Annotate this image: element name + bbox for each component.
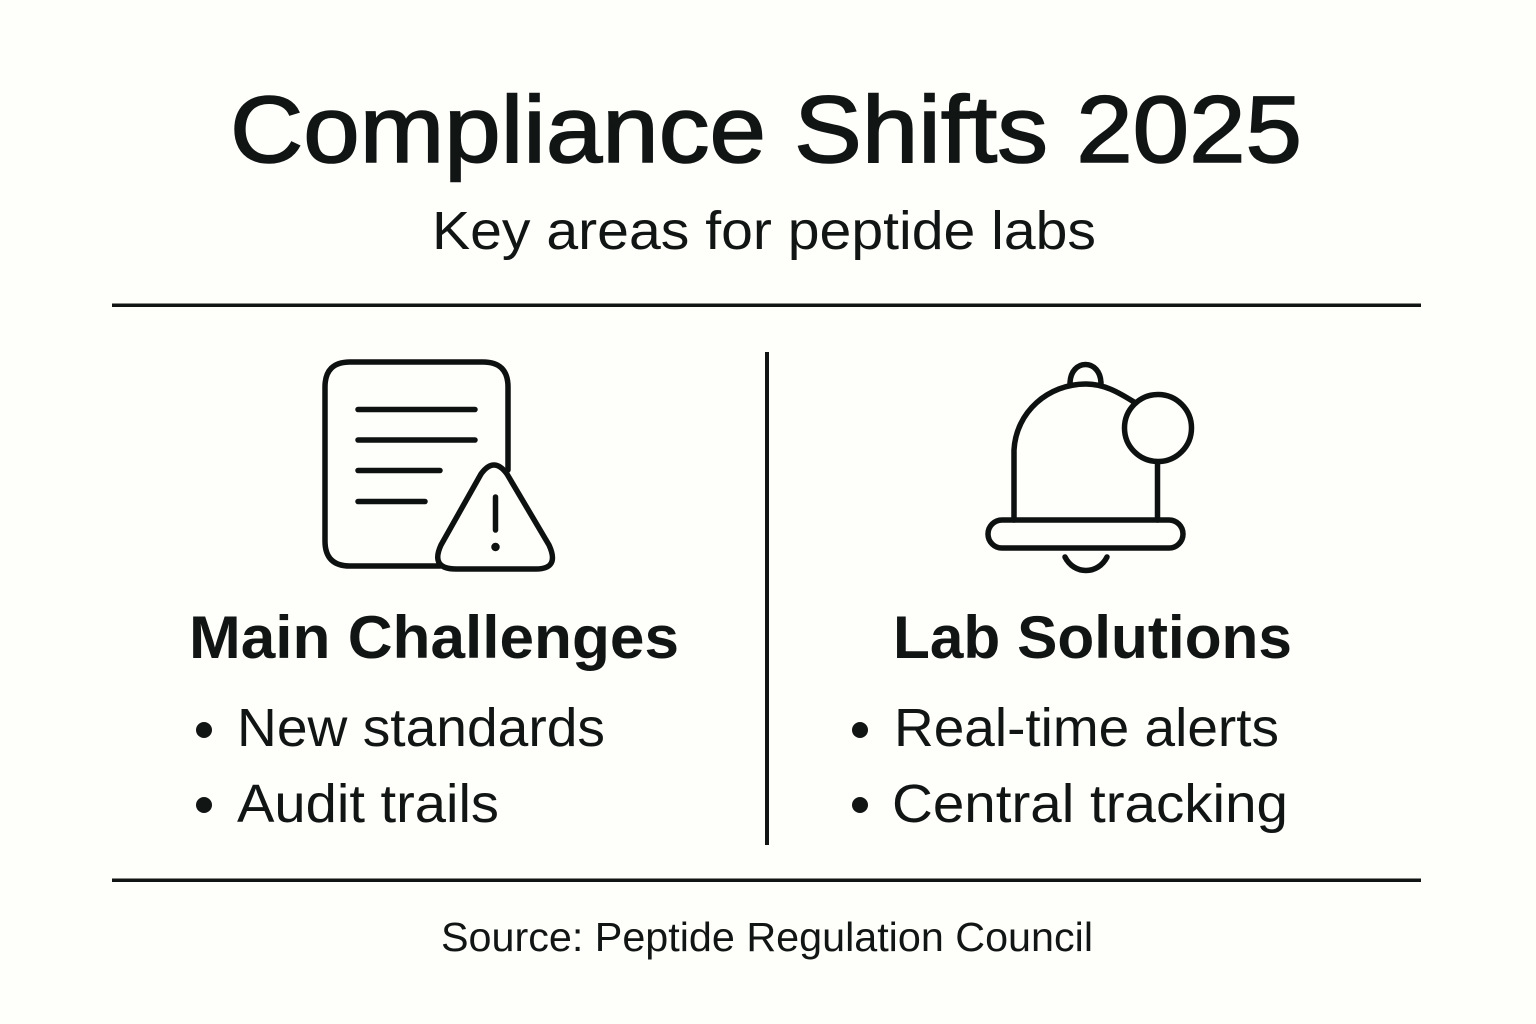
source note: Source: Peptide Regulation Council bbox=[441, 914, 1093, 960]
panel: main challenges bbox=[189, 362, 679, 834]
bullet list: challenges: New standards bbox=[237, 698, 605, 758]
subtitle: Key areas for peptide labs bbox=[432, 201, 1096, 261]
heading: main challenges: Main Challenges bbox=[189, 604, 679, 671]
bullet list: solutions bbox=[852, 698, 1288, 834]
bullet list: solutions: Central tracking bbox=[892, 774, 1288, 834]
bullet list: challenges bbox=[196, 698, 605, 834]
panel: lab solutions bbox=[852, 364, 1292, 834]
bullet list: solutions: Real-time alerts bbox=[894, 698, 1279, 758]
icon: bell with notification bbox=[988, 364, 1192, 570]
bullet list: challenges: Audit trails bbox=[237, 774, 499, 834]
title: Compliance Shifts 2025 bbox=[230, 77, 1302, 183]
icon: document with warning bbox=[325, 362, 552, 569]
heading: lab solutions: Lab Solutions bbox=[893, 604, 1292, 671]
